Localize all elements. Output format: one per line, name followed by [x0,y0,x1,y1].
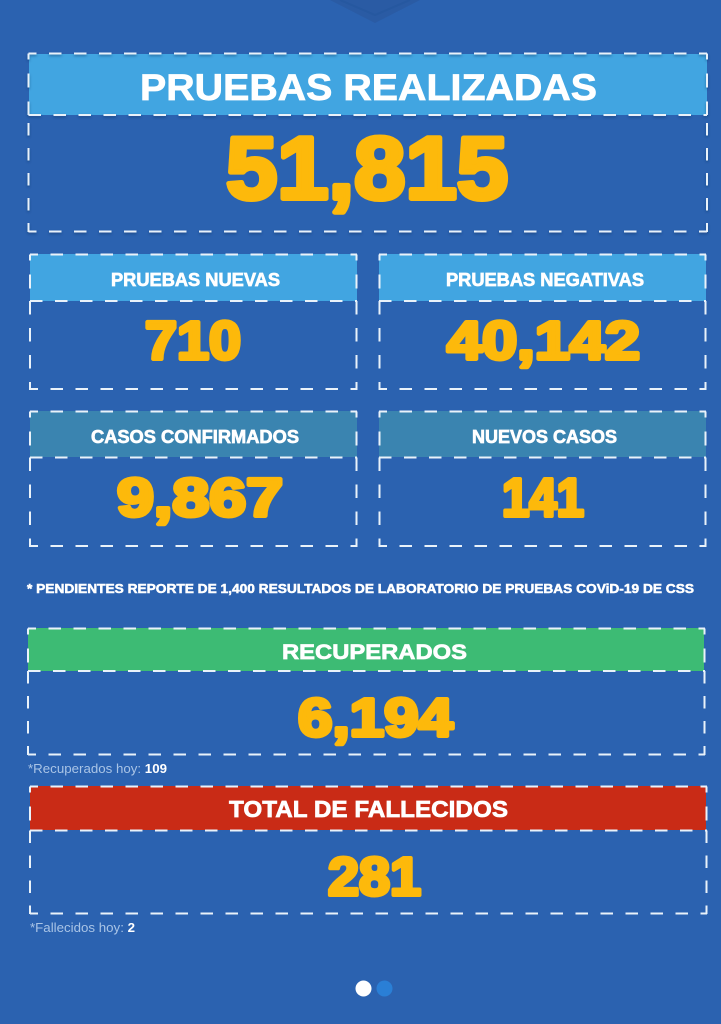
heading: recuperados: RECUPERADOS [282,640,467,664]
panel: pruebas realizadas [28,54,707,232]
number: 710: 710 [145,311,241,371]
pagination dots [356,980,392,996]
number: 281: 281 [328,847,421,907]
icon: top chevron [330,0,420,23]
number: 141: 141 [502,468,584,528]
dashed frame: main [28,54,707,232]
heading: total de fallecidos: TOTAL DE FALLECIDOS [229,796,508,822]
panel: pruebas negativas [379,254,706,390]
heading: pruebas negativas: PRUEBAS NEGATIVAS [446,269,644,290]
panel: pruebas nuevas [30,254,357,390]
dashed frame [30,254,357,390]
number: 51,815: 51,815 [226,118,508,218]
heading: pruebas realizadas: PRUEBAS REALIZADAS [140,67,597,108]
dashed frame [379,254,706,390]
header: pruebas realizadas [29,54,707,115]
panel: total de fallecidos [30,786,707,914]
heading: nuevos casos: NUEVOS CASOS [472,426,617,447]
heading: casos confirmados: CASOS CONFIRMADOS [91,426,299,447]
panel: nuevos casos [379,411,706,547]
heading: pruebas nuevas: PRUEBAS NUEVAS [111,269,280,290]
dashed frame [30,412,357,547]
panel: recuperados [28,628,705,755]
text block: pending results note: * PENDIENTES REPORTE DE 1,400 RESULTADOS DE LABORATORIO DE PRUEBAS COViD-19 DE CSS [27,582,694,596]
dashed frame [28,628,705,755]
dashed frame [379,412,706,547]
number: 6,194: 6,194 [298,688,453,748]
footnote: recuperados hoy: *Recuperados hoy: 109 [28,762,167,776]
number: 9,867: 9,867 [117,468,283,528]
dashed frame [30,786,707,914]
panel: casos confirmados [30,411,357,547]
footnote: fallecidos hoy: *Fallecidos hoy: 2 [30,921,135,935]
number: 40,142: 40,142 [447,311,640,371]
